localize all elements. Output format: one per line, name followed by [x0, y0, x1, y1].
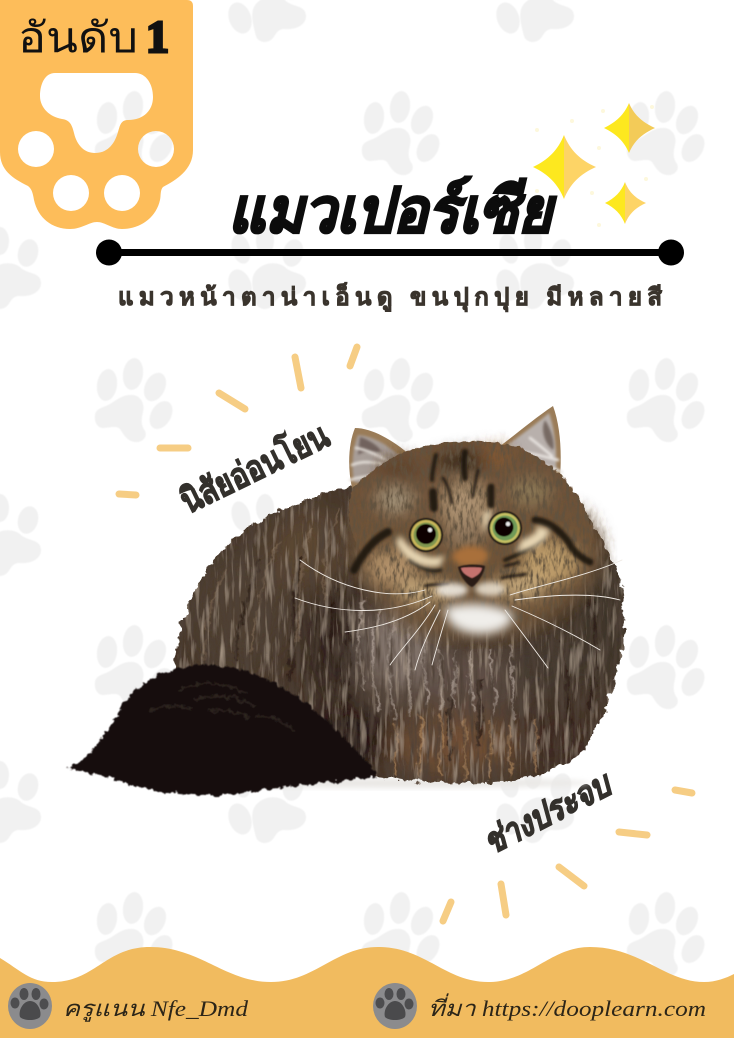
- subtitle: แมวหน้าตาน่าเอ็นดู ขนปุกปุย มีหลายสี: [118, 282, 662, 313]
- right eye: [488, 511, 522, 545]
- right ear: [495, 406, 562, 480]
- tan lower fur strands: [395, 715, 537, 780]
- sparkle stars: [533, 103, 655, 227]
- nose bridge: [452, 546, 488, 566]
- left ear: [349, 428, 418, 495]
- cat photo illustration: [68, 406, 624, 795]
- muzzle: [436, 582, 505, 597]
- trait label: affectionate: ช่างประจบ: [477, 764, 620, 862]
- upper burst dashes: [119, 347, 357, 495]
- light chest fur strands: [359, 600, 515, 720]
- cat head: [349, 441, 602, 637]
- rank number: 1: [146, 11, 169, 62]
- title divider line with end dots: [96, 240, 684, 266]
- mid-tone back fur strands: [205, 510, 340, 660]
- footer author: paw icon: [8, 983, 52, 1029]
- brow and eye highlights: [396, 511, 550, 567]
- tabby stripes: [354, 452, 590, 586]
- rank badge: orange paw: [0, 0, 193, 229]
- title: แมวเปอร์เซีย: [228, 176, 556, 246]
- nose: [458, 565, 485, 587]
- whiskers: [295, 560, 622, 670]
- fluffy tail: [68, 665, 378, 795]
- left eye: [409, 518, 443, 552]
- cat body: [175, 470, 624, 783]
- ground shadow: [210, 778, 590, 788]
- trait label: gentle: นิสัยอ่อนโยน: [174, 414, 335, 521]
- footer wave band: [0, 947, 734, 1038]
- footer author text: ครูแนน Nfe_Dmd: [63, 996, 249, 1022]
- rank label: อันดับ: [18, 14, 138, 61]
- footer source: paw icon: [373, 983, 417, 1029]
- footer source text: ที่มา https://dooplearn.com: [428, 993, 706, 1021]
- white chest patch: [445, 604, 512, 634]
- dark fur strands: [235, 560, 596, 760]
- lower burst dashes: [443, 790, 692, 921]
